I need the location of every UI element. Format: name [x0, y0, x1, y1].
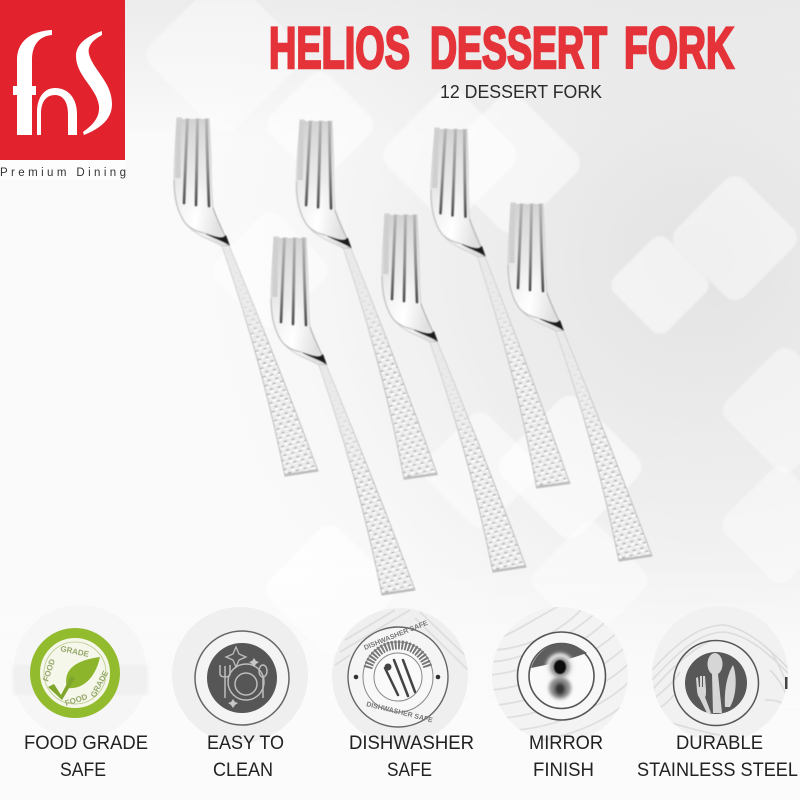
label: FINISH	[533, 759, 594, 781]
icon: food grade badge: FOOD	[41, 658, 57, 683]
icon: mirror ball reflection	[490, 603, 632, 743]
logo: red square	[0, 0, 125, 160]
icon: plate with sparkles	[172, 607, 308, 743]
label: EASY TO	[207, 732, 284, 754]
icon: fork spoon knife	[652, 624, 788, 742]
feature: dishwasher safe	[332, 608, 474, 781]
label: DISHWASHER	[349, 732, 474, 754]
label	[24, 732, 148, 781]
label: FOOD GRADE	[24, 732, 148, 754]
feature: mirror finish	[490, 603, 632, 781]
feature: easy to clean	[172, 607, 308, 781]
fork 6	[508, 203, 652, 562]
icon: food grade badge: FOOD	[64, 692, 89, 708]
icon: dishwasher safe seal: DISHWASHER SAFE	[366, 701, 434, 724]
label	[349, 732, 474, 781]
label: SAFE	[387, 759, 432, 781]
label: SAFE	[60, 759, 106, 781]
icon: dishwasher safe seal	[332, 608, 470, 744]
title: HELIOS	[269, 16, 410, 81]
label: CLEAN	[213, 759, 273, 781]
label: MIRROR	[529, 732, 603, 754]
label: DURABLE	[676, 732, 763, 754]
feature: durable stainless steel	[638, 624, 798, 776]
feature: food grade safe	[13, 605, 148, 781]
label	[207, 732, 284, 781]
fork 1	[174, 118, 318, 476]
logo	[0, 0, 126, 180]
logo: tagline: Premium Dining	[0, 167, 126, 179]
icon: food grade badge	[13, 605, 148, 739]
small dark mark	[785, 677, 788, 689]
fork 2	[293, 120, 441, 480]
logo: fnS monogram	[13, 30, 112, 135]
icon: food grade badge: GRADE	[60, 644, 90, 659]
forks group	[174, 118, 652, 596]
subtitle: 12 DESSERT FORK	[440, 82, 602, 102]
icon: food grade badge: GRADE	[89, 669, 111, 699]
logo: tagline	[0, 160, 126, 180]
label	[529, 732, 603, 781]
label	[637, 732, 798, 781]
fork 5	[426, 128, 576, 489]
title: DESSERT	[430, 16, 607, 81]
fork 3	[271, 237, 415, 596]
title	[269, 16, 734, 81]
icon: dishwasher safe seal: DISHWASHER SAFE	[363, 620, 429, 652]
title: FORK	[624, 16, 734, 81]
fork 4	[382, 214, 526, 572]
